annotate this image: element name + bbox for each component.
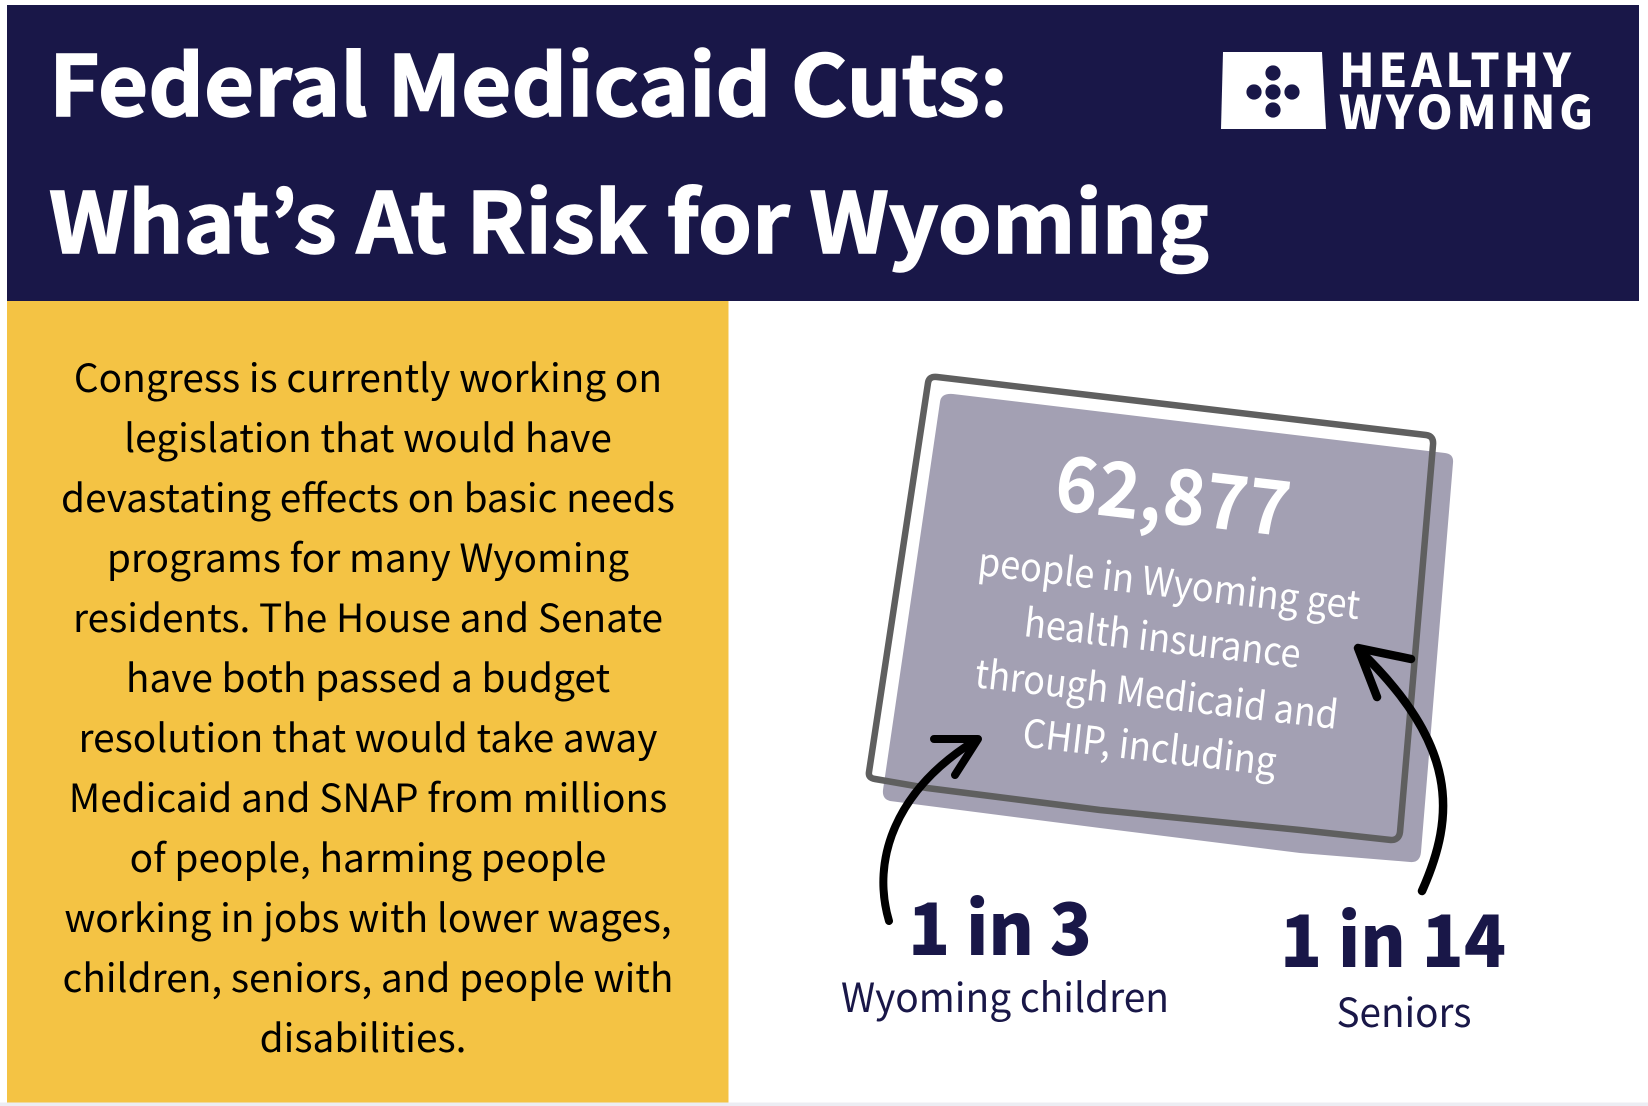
logo: Healthy Wyoming (1221, 35, 1593, 143)
intro paragraph: programs for many Wyoming (107, 528, 629, 584)
stat: 1 in 3 Wyoming children: 1 in 3 (908, 871, 1092, 976)
title (49, 20, 1209, 278)
statistic text: 62,877 (1050, 422, 1297, 558)
stat: 1 in 14 Seniors: Seniors (1336, 981, 1472, 1039)
stat: 1 in 3 Wyoming children: Wyoming children (841, 966, 1169, 1024)
intro paragraph: have both passed a budget (126, 648, 610, 704)
stat: 1 in 3 Wyoming children (841, 871, 1169, 1024)
logo wordmark: WYOMING (1339, 77, 1593, 143)
statistic text: through Medicaid and (972, 643, 1341, 741)
intro paragraph: of people, harming people (130, 828, 606, 884)
intro paragraph (61, 348, 675, 1064)
Wyoming shape fill (883, 394, 1453, 862)
icon: Wyoming state with cross of dots (1221, 52, 1326, 129)
stat: 1 in 14 Seniors: 1 in 14 (1280, 883, 1506, 988)
intro paragraph: children, seniors, and people with (63, 948, 673, 1004)
stat: 1 in 14 Seniors (1280, 883, 1506, 1039)
intro paragraph: residents. The House and Senate (73, 588, 663, 644)
intro paragraph: devastating effects on basic needs (61, 468, 675, 524)
arrow: seniors to state (1358, 648, 1443, 891)
statistic text: people in Wyoming get (975, 531, 1364, 631)
intro paragraph: Congress is currently working on (74, 348, 662, 404)
panel: yellow intro text (7, 301, 728, 1102)
title: Federal Medicaid Cuts: (49, 20, 1008, 141)
header band (7, 5, 1639, 301)
statistic text: health insurance (1022, 592, 1304, 680)
Wyoming shape outline (869, 377, 1433, 840)
intro paragraph: Medicaid and SNAP from millions (69, 768, 667, 824)
title: What’s At Risk for Wyoming (49, 157, 1209, 278)
intro paragraph: legislation that would have (124, 408, 612, 464)
intro paragraph: resolution that would take away (78, 708, 658, 764)
intro paragraph: disabilities. (260, 1008, 466, 1064)
logo wordmark (1339, 35, 1593, 143)
logo wordmark: HEALTHY (1339, 35, 1572, 101)
statistic text (972, 422, 1364, 788)
intro paragraph: working in jobs with lower wages, (64, 888, 672, 944)
graphic: Wyoming state statistic (841, 377, 1506, 1039)
arrow: children to state (883, 739, 978, 921)
statistic text: CHIP, including (1020, 703, 1280, 788)
